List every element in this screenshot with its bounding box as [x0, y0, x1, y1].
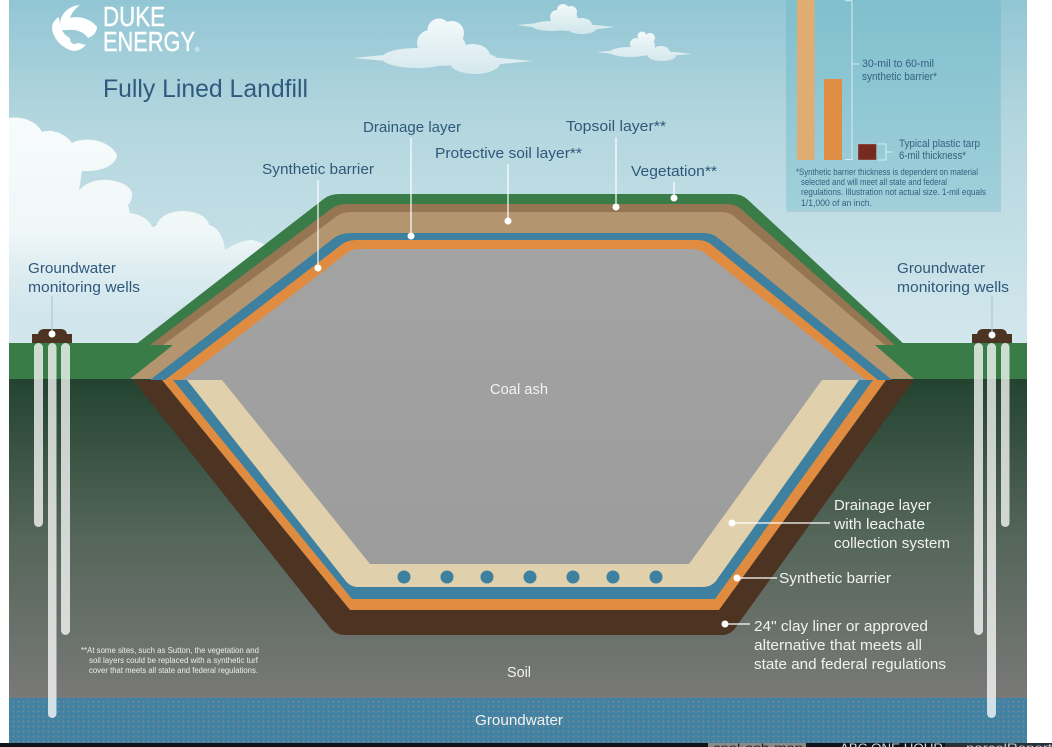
label: plastic tarp: Typical plastic tarp: [899, 138, 980, 150]
layer: lower drainage blue: [173, 380, 873, 599]
label: left groundwater monitoring wells: monitoring wells: [28, 279, 140, 296]
groundwater band: [9, 698, 1027, 743]
right monitoring wells: [972, 296, 1012, 718]
layer: topsoil: [150, 204, 895, 345]
label: right groundwater monitoring wells: [897, 260, 1009, 296]
label: protective soil layer with pointer: [435, 145, 582, 224]
label: right groundwater monitoring wells: Groundwater: [897, 260, 985, 277]
bottom screenshot strip: [0, 741, 1052, 747]
footnote: thickness: 1/1,000 of an inch.: [801, 198, 872, 208]
bar: lower limit barrier thickness: [824, 79, 842, 160]
layer: upper drainage: [150, 233, 892, 380]
layer: vegetation: [135, 194, 905, 345]
bar: plastic tarp thickness: [858, 144, 876, 160]
label: soil: Soil: [507, 664, 531, 681]
logo: Duke Energy: ®: [195, 47, 200, 54]
bracket: synthetic barrier: [845, 1, 859, 160]
coal ash: [182, 249, 866, 564]
label: synthetic barrier with pointer: Synthetic barrier: [262, 161, 374, 178]
label: drainage layer with leachate collection system: [728, 497, 950, 552]
label: clay liner: 24" clay liner or approved: [754, 618, 928, 635]
logo: Duke Energy: [52, 1, 200, 57]
layer: upper synthetic barrier: [165, 240, 878, 380]
footnote: synthetic turf: soil layers could be replaced with a synthetic turf: [89, 655, 259, 665]
label: drainage layer with leachate collection system: collection system: [834, 535, 950, 552]
label: protective soil layer with pointer: Protective soil layer**: [435, 145, 582, 162]
panel: barrier thickness comparison: [786, 0, 1001, 212]
label: clay liner: [722, 618, 946, 673]
label: synthetic barrier with pointer: [262, 161, 374, 272]
grass band: [9, 343, 1027, 379]
label: drainage layer with pointer: [363, 119, 461, 240]
label: plastic tarp: 6-mil thickness*: [899, 150, 967, 162]
logo: Duke Energy: DUKE: [103, 1, 165, 32]
cloud 3: [597, 32, 692, 61]
layer: protective soil: [130, 212, 914, 379]
footnote: thickness: regulations. Illustration not actual size. 1-mil equals: [801, 187, 986, 197]
label: groundwater: Groundwater: [475, 712, 563, 729]
sky background: [9, 0, 1027, 344]
footnote: thickness: selected and will meet all state and federal: [801, 177, 947, 187]
label: drainage layer with leachate collection system: Drainage layer: [834, 497, 931, 514]
bracket: plastic tarp: [878, 144, 893, 160]
layer: lower synthetic barrier: [162, 380, 886, 610]
label: left groundwater monitoring wells: [28, 260, 140, 296]
title: Fully Lined Landfill: [103, 75, 308, 103]
layer: clay liner: [133, 380, 914, 635]
left monitoring wells: [32, 296, 72, 718]
label: topsoil layer with pointer: [566, 118, 666, 210]
label: clay liner: state and federal regulations: [754, 656, 946, 673]
label: synthetic barrier range: [862, 58, 938, 83]
logo: Duke Energy: ENERGY: [103, 26, 195, 57]
label: right groundwater monitoring wells: monitoring wells: [897, 279, 1009, 296]
label: synthetic barrier range: synthetic barrier*: [862, 71, 938, 83]
soil: [9, 379, 1027, 699]
bar: upper limit barrier thickness: [797, 0, 814, 160]
footnote: thickness: [796, 167, 986, 208]
cloud 2: [517, 4, 615, 34]
label: drainage layer with pointer: Drainage layer: [363, 119, 461, 136]
cloud 1: [353, 18, 533, 74]
label: lower synthetic barrier: [734, 570, 891, 587]
label: vegetation with pointer: [631, 163, 717, 202]
label: clay liner: alternative that meets all: [754, 637, 922, 654]
label: vegetation with pointer: Vegetation**: [631, 163, 717, 180]
leachate collection pipes: [398, 570, 662, 584]
label: coal ash: Coal ash: [490, 381, 548, 398]
footnote: thickness: *Synthetic barrier thickness is dependent on material: [796, 167, 978, 177]
label: left groundwater monitoring wells: Groundwater: [28, 260, 116, 277]
footnote: synthetic turf: **At some sites, such as Sutton, the vegetation and: [81, 645, 259, 655]
footnote: synthetic turf: [81, 645, 259, 675]
label: lower synthetic barrier: Synthetic barrier: [779, 570, 891, 587]
footnote: synthetic turf: cover that meets all state and federal regulations.: [89, 665, 258, 675]
label: drainage layer with leachate collection system: with leachate: [833, 516, 925, 533]
label: synthetic barrier range: 30-mil to 60-mil: [862, 58, 934, 70]
layer: drainage with leachate collection: [187, 380, 859, 587]
label: plastic tarp: [899, 138, 980, 162]
label: topsoil layer with pointer: Topsoil layer**: [566, 118, 666, 135]
large cloud at left: [9, 118, 290, 345]
